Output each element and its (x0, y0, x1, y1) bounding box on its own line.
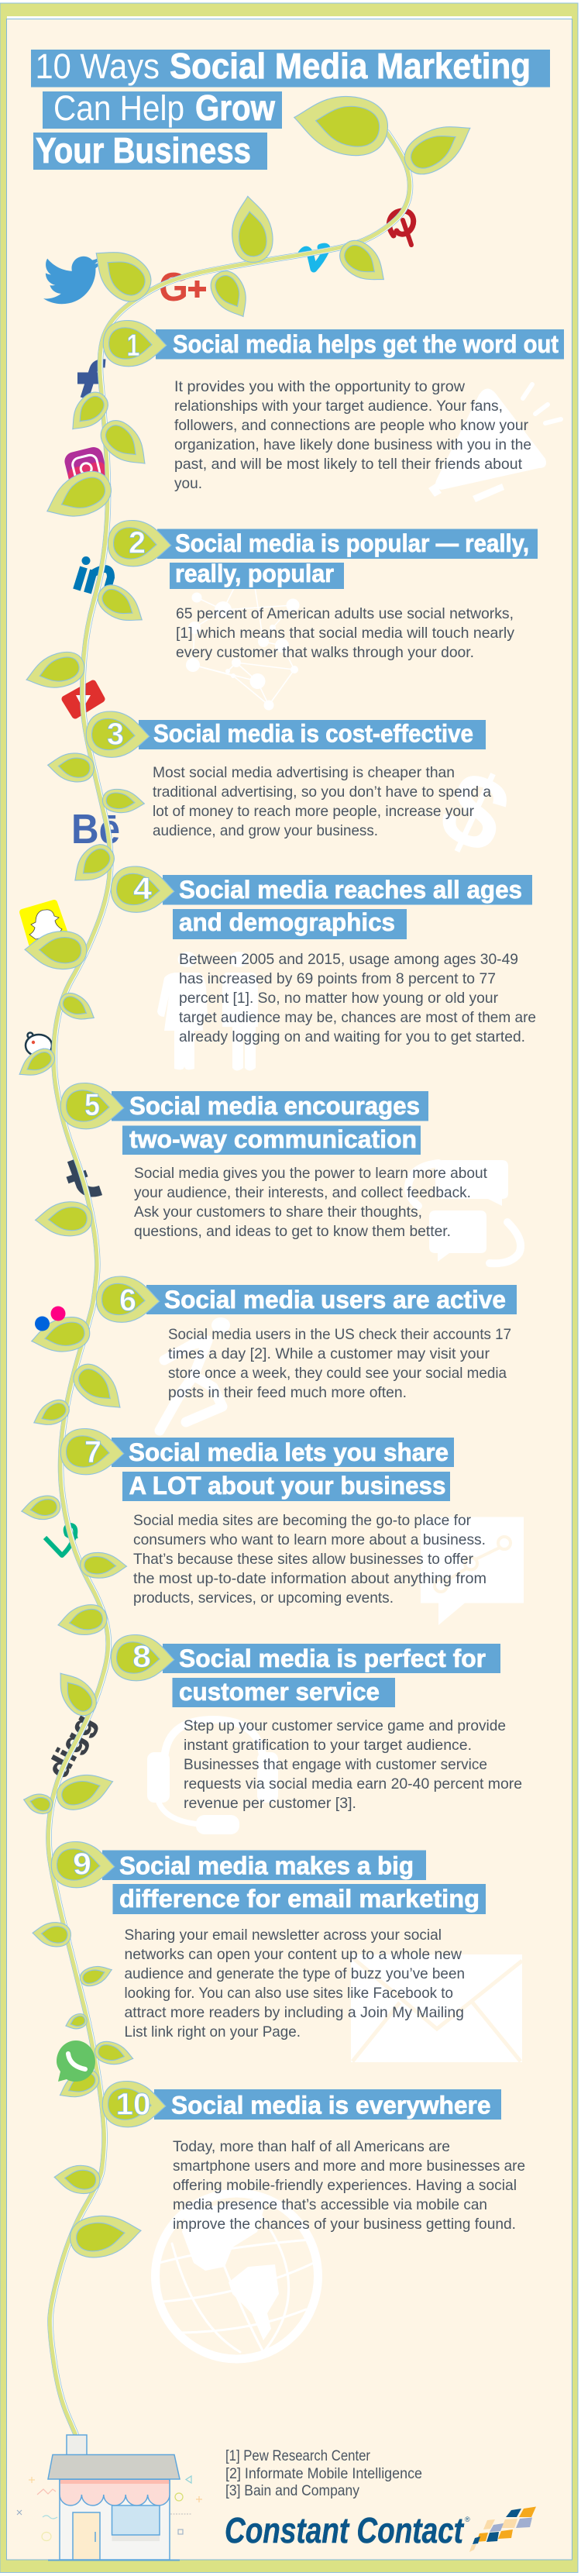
icon: whatsapp (57, 2040, 95, 2082)
icon: google plus (159, 265, 206, 310)
body text: questions, and ideas to get to know them better. (134, 1223, 451, 1240)
icon: snapchat (22, 903, 65, 944)
body text: your audience, their interests, and collect feedback. (134, 1184, 471, 1201)
title (31, 46, 550, 170)
panel: section 6 (95, 1275, 517, 1431)
panel: section 1 (102, 319, 564, 502)
body text: requests via social media earn 20-40 percent more (184, 1775, 522, 1793)
body text: attract more readers by including a Join My Mailing (124, 2004, 464, 2021)
watermark: speech box with share icon (421, 1517, 524, 1625)
icon: linkedin (77, 556, 111, 599)
icon: youtube (65, 684, 101, 715)
icon: flickr dots (35, 1307, 65, 1331)
icon: digg: digg (42, 1710, 101, 1783)
heading (163, 1644, 500, 1707)
body text: followers, and connections are people who know your (174, 417, 528, 434)
title: Your Business (36, 130, 251, 170)
footnotes: [2] Informate Mobile Intelligence (225, 2466, 422, 2482)
heading: difference for email marketing (119, 1885, 480, 1913)
title: Social Media Marketing (170, 46, 531, 86)
number leaf 7 (60, 1427, 125, 1476)
number leaf 1 (102, 319, 167, 368)
body text: you. (174, 475, 202, 492)
icon: vimeo (301, 246, 327, 269)
body text (133, 1512, 486, 1607)
body text: List link right on your Page. (124, 2023, 301, 2040)
body text: Social media gives you the power to learn more about (134, 1165, 488, 1182)
body text: Sharing your email newsletter across your social (124, 1927, 442, 1944)
heading: two-way communication (129, 1125, 417, 1153)
vine leaves (14, 88, 480, 2261)
number leaf 4: 4 (133, 872, 153, 906)
watermark: runner (160, 1317, 230, 1431)
body text: Social media sites are becoming the go-to place for (133, 1512, 471, 1529)
body text (179, 951, 536, 1045)
panel: section 7 (60, 1427, 524, 1625)
number leaf 2 (107, 519, 172, 568)
body text: lot of money to reach more people, increase your (153, 803, 474, 820)
number leaf 10 (101, 2080, 167, 2129)
heading (112, 1438, 454, 1501)
number leaf 9: 9 (73, 1848, 91, 1882)
heading (157, 529, 538, 589)
body text: the most up-to-date information about anything from (133, 1570, 486, 1587)
body text: offering mobile-friendly experiences. Having a social (173, 2177, 517, 2194)
body text: past, and will be most likely to tell their friends about (174, 456, 523, 473)
body text: audience, and grow your business. (153, 822, 378, 839)
body text: 65 percent of American adults use social networks, (176, 605, 514, 622)
body text: media presence that’s accessible via mobile can (173, 2196, 487, 2213)
panel: section 8 (110, 1634, 522, 1834)
body text (153, 764, 491, 839)
body text: Step up your customer service game and provide (184, 1717, 506, 1734)
panel: section 3 (85, 710, 526, 876)
number leaf 3: 3 (107, 718, 124, 752)
body text: revenue per customer [3]. (184, 1795, 356, 1812)
watermark: globe (155, 2193, 318, 2359)
body text: every customer that walks through your door. (176, 644, 474, 661)
panel: section 4 (110, 865, 536, 1071)
heading: really, popular (175, 560, 334, 587)
icons behind the vine (22, 211, 414, 1783)
watermark: headset (147, 1720, 278, 1834)
footnotes (225, 2448, 422, 2499)
body text: audience and generate the type of buzz you’ve been (124, 1965, 465, 1982)
body text (173, 2138, 525, 2233)
title: 10 Ways (36, 46, 160, 86)
watermark: network (186, 577, 299, 710)
body text: relationships with your target audience. Your fans, (174, 398, 503, 415)
body text: consumers who want to learn more about a business. (133, 1531, 486, 1548)
number leaf 1: 1 (127, 329, 139, 363)
body text: store once a week, they could see your social media (168, 1365, 507, 1382)
body text: has increased by 69 points from 8 percent to 77 (179, 970, 496, 987)
heading: Social media is perfect for (179, 1644, 486, 1672)
body text: Businesses that engage with customer service (184, 1756, 487, 1773)
body text: times a day [2]. While a customer may visit your (168, 1345, 490, 1362)
heading (163, 875, 532, 939)
heading: customer service (179, 1678, 380, 1706)
body text (168, 1326, 511, 1401)
panel: section 5 (60, 1082, 521, 1263)
body text (174, 378, 531, 492)
footnotes: [1] Pew Research Center (225, 2448, 371, 2464)
storefront (48, 2435, 180, 2561)
heading: Social media is popular — really, (175, 529, 529, 557)
number leaf 8 (110, 1634, 175, 1682)
heading: Social media reaches all ages (179, 876, 522, 904)
body text: posts in their feed much more often. (168, 1384, 407, 1401)
footnotes: [3] Bain and Company (225, 2483, 359, 2499)
title: Grow (195, 88, 275, 128)
body text: That’s because these sites allow businesses to offer (133, 1551, 473, 1568)
number leaf 6: 6 (119, 1283, 136, 1317)
icon: tumblr (67, 1160, 101, 1192)
number leaf 4 (110, 865, 175, 914)
body text: smartphone users and more and more businesses are (173, 2158, 525, 2175)
panel: section 9 (50, 1841, 522, 2062)
body text: already logging on and waiting for you to get started. (179, 1028, 525, 1045)
watermark: megaphone (428, 384, 561, 502)
heading (112, 1091, 428, 1155)
icon: twitter (43, 257, 101, 304)
heading: and demographics (179, 908, 395, 936)
number leaf 5: 5 (84, 1088, 100, 1122)
body text: Today, more than half of all Americans are (173, 2138, 450, 2155)
body text: target audience may be, chances are most of them are (179, 1009, 536, 1026)
body text: traditional advertising, so you don’t have to spend a (153, 783, 491, 801)
heading: Social media is everywhere (171, 2091, 491, 2119)
title: Can Help (53, 88, 184, 128)
logo: Constant Contact: Constant Contact (225, 2510, 464, 2550)
number leaf 2: 2 (129, 525, 146, 560)
number leaf 3 (85, 710, 150, 759)
body text: instant gratification to your target audience. (184, 1737, 472, 1754)
body text (134, 1165, 488, 1240)
watermark: people (157, 952, 258, 1071)
body text (124, 1927, 465, 2040)
icon: facebook (77, 363, 105, 398)
body text (176, 605, 514, 661)
doodles around storefront (17, 2476, 202, 2540)
number leaf 7: 7 (84, 1435, 101, 1469)
watermark: envelope (351, 1954, 522, 2062)
number leaf 9 (50, 1841, 115, 1889)
body text: [1] which means that social media will touch nearly (176, 625, 514, 642)
watermark: dollar sign: $ (425, 746, 526, 876)
body text: It provides you with the opportunity to grow (174, 378, 466, 395)
body text: Social media users in the US check their accounts 17 (168, 1326, 511, 1343)
icon: reddit (26, 1032, 56, 1056)
body text: products, services, or upcoming events. (133, 1589, 394, 1607)
body text: organization, have likely done business with you in the (174, 436, 531, 453)
body text (184, 1717, 522, 1812)
heading (102, 1851, 486, 1914)
body text: Ask your customers to share their thoughts, (134, 1204, 422, 1221)
heading: Social media users are active (164, 1286, 506, 1314)
heading: A LOT about your business (129, 1472, 446, 1500)
number leaf 5 (60, 1082, 125, 1131)
heading: Social media encourages (129, 1092, 420, 1120)
body text: percent [1]. So, no matter how young or old your (179, 990, 498, 1007)
heading: Social media makes a big (119, 1852, 414, 1880)
vine stem (48, 133, 411, 2434)
watermark: chat bubbles (408, 1160, 521, 1263)
icon: vine (45, 1525, 77, 1555)
icon: behance: Bē (71, 806, 120, 852)
number leaf 8: 8 (132, 1640, 151, 1674)
body text: looking for. You can also use sites like Facebook to (124, 1985, 453, 2002)
body text: Between 2005 and 2015, usage among ages 30-49 (179, 951, 518, 968)
number leaf 10: 10 (116, 2088, 150, 2122)
heading: Social media lets you share (129, 1438, 449, 1466)
logo: Constant Contact: ® (465, 2516, 470, 2523)
heading: Social media is cost-effective (153, 719, 473, 747)
number leaf 6 (95, 1275, 160, 1324)
panel: section 2 (107, 519, 538, 710)
body text: Most social media advertising is cheaper than (153, 764, 455, 781)
body text: networks can open your content up to a whole new (124, 1946, 462, 1963)
icon: instagram (63, 445, 110, 492)
panel: section 10 (101, 2080, 525, 2359)
body text: improve the chances of your business getting found. (173, 2216, 516, 2233)
icon: pinterest (389, 211, 414, 245)
icon: google plus: G (159, 265, 188, 310)
